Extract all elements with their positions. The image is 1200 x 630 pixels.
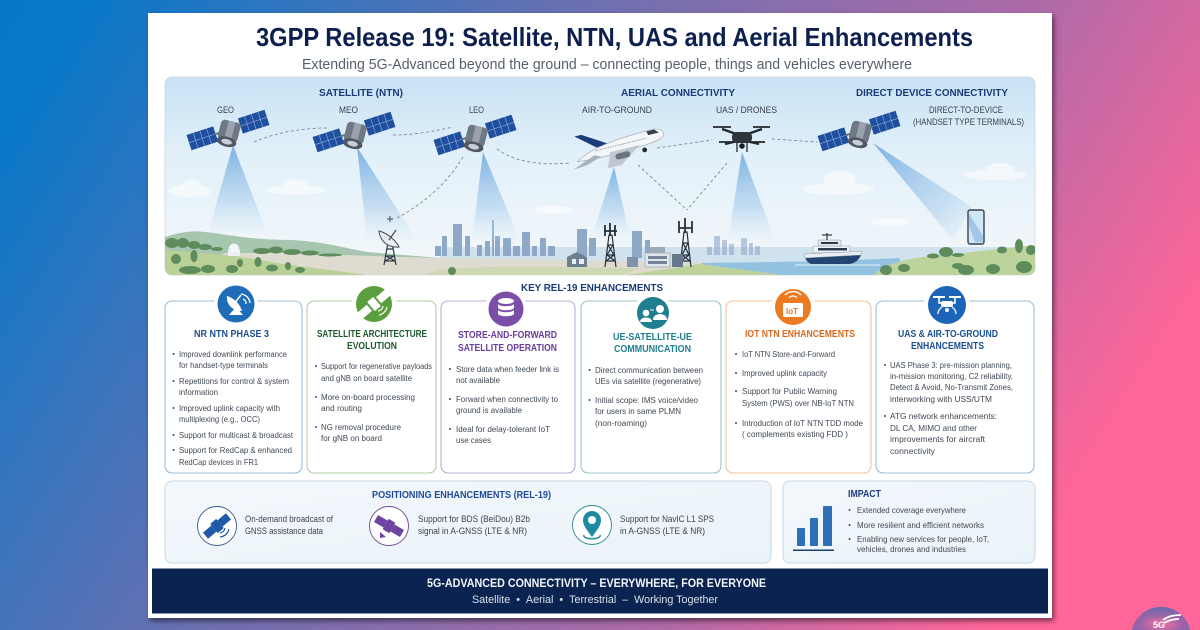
panel: UE-satellite-UE communication <box>581 293 721 473</box>
card title: SATELLITE ARCHITECTURE <box>317 328 427 340</box>
beam: LEO coverage <box>472 152 520 240</box>
text: BDS support: signal in A-GNSS (LTE & NR) <box>418 526 527 536</box>
icon: corner 5G logo <box>1132 607 1190 630</box>
landscape ground <box>165 163 1040 276</box>
label: satellite NTN: SATELLITE (NTN) <box>319 87 403 99</box>
bullet list: Direct communication between <box>595 365 703 375</box>
beam: drone coverage <box>728 152 775 240</box>
bullet list: for gNB on board <box>321 433 382 443</box>
footer tagline: Satellite • Aerial • Terrestrial – Working Together <box>472 594 718 606</box>
bullet list: UEs via satellite (regenerative) <box>595 376 701 386</box>
card title <box>458 329 557 354</box>
bullet list: Improved downlink performance <box>179 349 287 359</box>
bullet list: in-mission monitoring, C2 reliability, <box>890 371 1013 381</box>
icon: aircraft <box>566 115 668 177</box>
bullet list: NG removal procedure <box>321 422 401 432</box>
bullet list: DL CA, MIMO and other <box>890 423 977 433</box>
beam: MEO coverage <box>357 147 417 240</box>
bullet list: Support for multicast & broadcast <box>179 430 294 440</box>
panel: NR NTN Phase 3 <box>165 282 302 473</box>
card title <box>898 328 998 352</box>
bullet list: More on-board processing <box>321 392 415 402</box>
bullet list <box>884 360 1013 456</box>
bullet list: Improved uplink capacity <box>742 368 828 378</box>
icon: corner 5G logo: 5G <box>1153 620 1165 630</box>
text: on-demand broadcast <box>245 514 333 536</box>
bullet list <box>315 361 432 443</box>
label: GEO: GEO <box>217 105 234 115</box>
panel: positioning enhancements <box>165 481 771 563</box>
bullet list: vehicles, drones and industries <box>857 544 966 554</box>
section heading: key enhancements: KEY REL-19 ENHANCEMENTS <box>521 282 663 294</box>
distant city skylines <box>435 220 760 258</box>
label: UAS drones: UAS / DRONES <box>716 105 777 115</box>
bullet list: Improved uplink capacity with <box>179 403 280 413</box>
bullet list: use cases <box>456 435 491 445</box>
sky background <box>165 77 1035 275</box>
bullet list: Enabling new services for people, IoT, <box>857 534 989 544</box>
label: direct-to-device: (HANDSET TYPE TERMINALS) <box>913 117 1024 127</box>
bullet list: for handset-type terminals <box>179 360 268 370</box>
icon: ship <box>795 233 880 265</box>
bullet list: Extended coverage everywhere <box>857 505 966 515</box>
card title: ENHANCEMENTS <box>911 340 984 352</box>
bullet list: and gNB on board satellite <box>321 373 412 383</box>
bullet list: System (PWS) over NB-IoT NTN <box>742 398 854 408</box>
bullet list: UAS Phase 3: pre-mission planning, <box>890 360 1012 370</box>
icon: two users <box>633 293 673 333</box>
icon: direct-to-device satellite <box>818 111 900 151</box>
icon: smartphone <box>968 210 984 244</box>
text: NavIC support <box>620 514 714 536</box>
beam: aircraft coverage <box>592 167 630 237</box>
card title: STORE-AND-FORWARD <box>458 329 557 341</box>
label: air-to-ground: AIR-TO-GROUND <box>582 105 652 115</box>
bullet list <box>172 349 294 467</box>
bullet list <box>735 349 863 439</box>
bullet list: ground is available <box>456 405 522 415</box>
bullet list: ( complements existing FDD ) <box>742 429 848 439</box>
bullet list: Introduction of IoT NTN TDD mode <box>742 418 863 428</box>
label: LEO: LEO <box>469 105 484 115</box>
text: NavIC support: Support for NavIC L1 SPS <box>620 514 714 524</box>
bullet list: interworking with USS/UTM <box>890 394 992 404</box>
subtitle: Extending 5G-Advanced beyond the ground – connecting people, things and vehicles everywhere <box>302 57 912 73</box>
label: aerial connectivity: AERIAL CONNECTIVITY <box>621 87 735 99</box>
card title <box>317 328 427 352</box>
bullet list <box>588 365 703 428</box>
bullet list: Ideal for delay-tolerant IoT <box>456 424 551 434</box>
icon: BeiDou satellite <box>370 506 408 546</box>
label: MEO: MEO <box>339 105 358 115</box>
panel: UAS and air-to-ground enhancements <box>876 282 1034 473</box>
bullet list: multiplexing (e.g., OCC) <box>179 414 260 424</box>
icon: ground station dish <box>379 216 399 265</box>
card title: UE-SATELLITE-UE <box>613 331 692 343</box>
panel: store-and-forward satellite operation <box>441 288 575 473</box>
bullet list: Support for RedCap & enhanced <box>179 445 292 455</box>
label: direct-to-device: DIRECT-TO-DEVICE <box>929 105 1003 115</box>
panel: impact <box>783 481 1035 563</box>
icon: location pin <box>572 506 612 544</box>
label: direct-to-device <box>913 105 1024 127</box>
bullet list <box>848 505 989 554</box>
white report sheet <box>148 13 1052 618</box>
main title: 3GPP Release 19: Satellite, NTN, UAS and Aerial Enhancements <box>256 22 973 52</box>
bullet list: More resilient and efficient networks <box>857 520 984 530</box>
icon: satellite <box>352 282 396 326</box>
bullet list: Initial scope: IMS voice/video <box>595 395 698 405</box>
beam: GEO coverage <box>208 145 267 233</box>
card title <box>613 331 692 355</box>
beam: direct-to-device coverage <box>873 143 972 240</box>
text: BDS support: Support for BDS (BeiDou) B2b <box>418 514 530 524</box>
bullet list: IoT NTN Store-and-Forward <box>742 349 835 359</box>
bullet list: not available <box>456 375 500 385</box>
icon: IoT signal <box>771 285 815 329</box>
bullet list: Support for Public Warning <box>742 386 837 396</box>
bullet list: Store data when feeder link is <box>456 364 559 374</box>
card title: COMMUNICATION <box>614 343 691 355</box>
icon: database <box>485 288 527 330</box>
panel: satellite architecture evolution <box>307 282 436 473</box>
bullet list: improvements for aircraft <box>890 434 986 444</box>
bullet list: connectivity <box>890 446 936 456</box>
bullet list: (non-roaming) <box>595 418 647 428</box>
icon: MEO satellite <box>313 112 395 152</box>
bullet list: RedCap devices in FR1 <box>179 457 258 467</box>
bullet list: Detect & Avoid, No-Transmit Zones, <box>890 382 1013 392</box>
dashed inter-node links <box>254 127 817 218</box>
icon: IoT signal: IoT <box>786 307 798 316</box>
panel heading: POSITIONING ENHANCEMENTS (REL-19) <box>372 490 551 501</box>
footer headline: 5G-ADVANCED CONNECTIVITY – EVERYWHERE, FOR EVERYONE <box>427 576 766 590</box>
icon: buildings <box>228 244 683 267</box>
card title: IOT NTN ENHANCEMENTS <box>745 328 855 340</box>
bullet list: for users in same PLMN <box>595 406 681 416</box>
icon: GEO satellite <box>187 110 269 150</box>
footer banner <box>152 568 1048 614</box>
bullet list: Forward when connectivity to <box>456 394 558 404</box>
icon: GNSS satellite <box>198 506 236 546</box>
text: on-demand broadcast: GNSS assistance data <box>245 526 323 536</box>
bullet list <box>449 364 559 445</box>
icon: LEO satellite <box>434 115 516 155</box>
panel: connectivity scene <box>165 77 1040 276</box>
icon: drone <box>713 127 770 152</box>
panel: IoT NTN enhancements <box>726 285 871 473</box>
text: NavIC support: in A-GNSS (LTE & NR) <box>620 526 705 536</box>
bullet list: ATG network enhancements: <box>890 411 997 421</box>
bullet list: Support for regenerative payloads <box>321 361 432 371</box>
card title: NR NTN PHASE 3 <box>194 328 269 340</box>
text: BDS support <box>418 514 530 536</box>
icon: bar chart <box>793 506 834 551</box>
label: direct device connectivity: DIRECT DEVICE CONNECTIVITY <box>856 87 1008 99</box>
card title: SATELLITE OPERATION <box>458 342 557 354</box>
icon: satellite dish <box>214 282 258 326</box>
bullet list: and routing <box>321 403 362 413</box>
icon: drone badge <box>924 282 970 328</box>
icon: cell towers <box>604 218 692 267</box>
text: on-demand broadcast: On-demand broadcast of <box>245 514 333 524</box>
panel heading: IMPACT <box>848 489 881 500</box>
bullet list: Repetitions for control & system <box>179 376 289 386</box>
card title: UAS & AIR-TO-GROUND <box>898 328 998 340</box>
card title: EVOLUTION <box>347 340 397 352</box>
bullet list: information <box>179 387 218 397</box>
